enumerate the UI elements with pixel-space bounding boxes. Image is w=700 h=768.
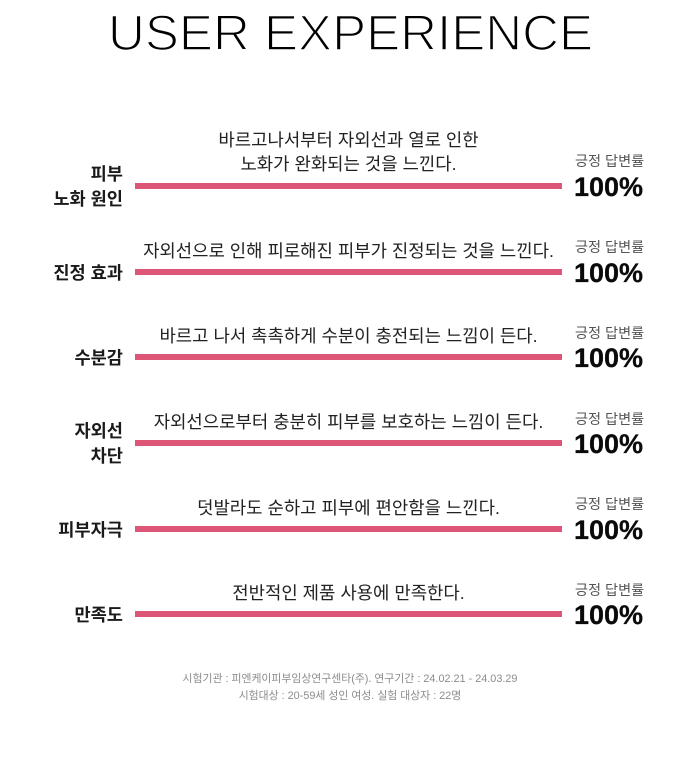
question text: 노화가 완화되는 것을 느낀다. — [240, 154, 457, 174]
row label — [53, 164, 123, 209]
question text: 자외선으로부터 충분히 피부를 보호하는 느낌이 든다. — [154, 412, 543, 432]
row: UV protection — [74, 412, 644, 466]
question text: 바르고나서부터 자외선과 열로 인한 — [218, 130, 479, 150]
row label: 피부 — [91, 164, 123, 184]
row label — [74, 421, 123, 466]
bar — [135, 354, 562, 360]
row label: 만족도 — [74, 605, 123, 625]
question text — [218, 130, 479, 174]
row label: 노화 원인 — [53, 189, 123, 209]
footnote — [183, 672, 517, 702]
positive response label: 긍정 답변률 — [575, 497, 644, 513]
row label: 진정 효과 — [53, 262, 123, 282]
positive response label: 긍정 답변률 — [575, 326, 644, 342]
footnote: 시험대상 : 20-59세 성인 여성. 실험 대상자 : 22명 — [239, 690, 461, 702]
percentage: 100% — [574, 343, 643, 373]
question text: 덧발라도 순하고 피부에 편안함을 느낀다. — [197, 498, 500, 518]
bar — [135, 440, 562, 446]
percentage: 100% — [574, 514, 643, 544]
row: satisfaction — [74, 582, 644, 630]
bar — [135, 183, 562, 189]
row: skin irritation — [58, 497, 644, 544]
bar — [135, 526, 562, 532]
percentage: 100% — [574, 258, 643, 288]
positive response label: 긍정 답변률 — [575, 582, 644, 598]
question text: 바르고 나서 촉촉하게 수분이 충전되는 느낌이 든다. — [159, 326, 538, 346]
positive response label: 긍정 답변률 — [575, 240, 644, 256]
footnote: 시험기관 : 피엔케이피부임상연구센타(주). 연구기간 : 24.02.21 - 24.03.29 — [183, 673, 517, 685]
row label: 수분감 — [74, 348, 123, 368]
percentage: 100% — [574, 429, 643, 459]
bar — [135, 611, 562, 617]
row: soothing — [53, 240, 644, 288]
question text: 자외선으로 인해 피로해진 피부가 진정되는 것을 느낀다. — [143, 240, 554, 260]
question text: 전반적인 제품 사용에 만족한다. — [232, 583, 465, 603]
positive response label: 긍정 답변률 — [575, 154, 644, 170]
row: skin aging — [53, 130, 644, 209]
row: moisture — [74, 326, 644, 373]
title: USER EXPERIENCE — [108, 5, 593, 61]
row label: 피부자극 — [58, 520, 123, 540]
positive response label: 긍정 답변률 — [575, 412, 644, 428]
row label: 자외선 — [74, 421, 123, 441]
percentage: 100% — [574, 172, 643, 202]
row label: 차단 — [91, 446, 123, 466]
bar — [135, 268, 562, 274]
percentage: 100% — [574, 600, 643, 630]
